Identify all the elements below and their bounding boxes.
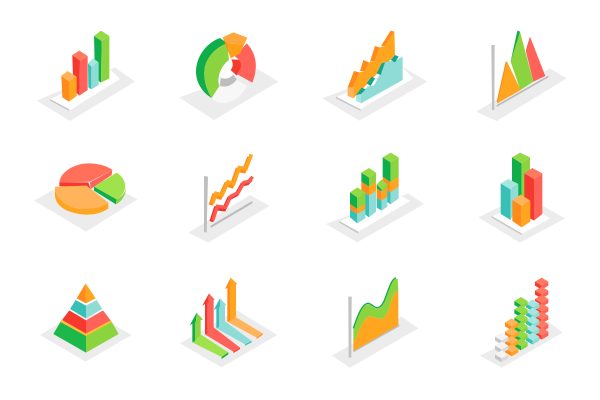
icon: stacked bar chart bbox=[326, 153, 424, 242]
icon: triangle peaks chart bbox=[476, 31, 567, 121]
icon: bar chart bbox=[37, 31, 135, 121]
icon: grouped bars bbox=[478, 153, 565, 243]
icon: block column chart bbox=[480, 278, 563, 368]
icon: wave area chart bbox=[332, 278, 418, 368]
icon: rising arrows bbox=[180, 278, 277, 367]
icon: line chart bbox=[188, 154, 269, 243]
icon: pyramid bbox=[40, 283, 132, 362]
icon: donut chart bbox=[179, 32, 278, 120]
icon: stepped area chart bbox=[322, 31, 427, 121]
icon: pie chart bbox=[34, 163, 137, 232]
